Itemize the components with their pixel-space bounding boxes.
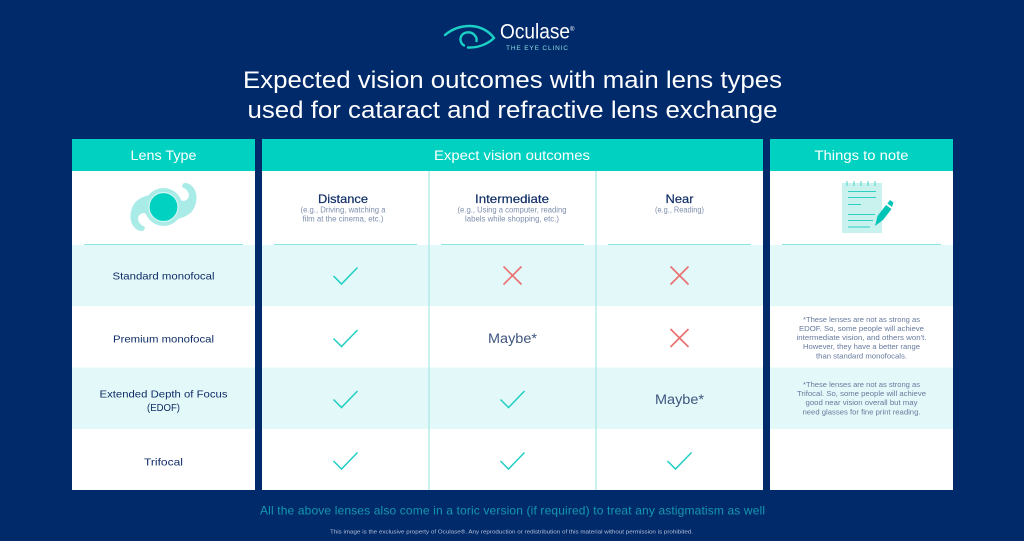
row labels: Trifocal bbox=[144, 456, 183, 468]
row bands bbox=[262, 245, 763, 306]
heading bbox=[770, 139, 953, 171]
column: near: (e.g., Reading) bbox=[655, 206, 704, 214]
logo bbox=[445, 20, 575, 52]
title bbox=[243, 67, 782, 124]
note: premium monofocal: *These lenses are not as strong as bbox=[803, 315, 920, 324]
row marks: EDOF bbox=[334, 391, 705, 408]
panel: things to note: Things to note bbox=[814, 148, 908, 163]
title: Expected vision outcomes with main lens types bbox=[243, 67, 782, 94]
panel: lens type bbox=[72, 139, 255, 490]
footnote: toric: All the above lenses also come in a toric version (if required) to treat any astigmatism as well bbox=[260, 504, 765, 518]
column: intermediate bbox=[458, 192, 566, 224]
note: EDOF bbox=[797, 380, 926, 416]
column: distance bbox=[300, 192, 386, 224]
icon: eye bbox=[445, 26, 494, 48]
heading bbox=[72, 139, 255, 171]
panel: vision outcomes: Expect vision outcomes bbox=[434, 148, 590, 163]
panel: things to note bbox=[770, 139, 953, 490]
row labels: Premium monofocal bbox=[113, 334, 214, 346]
note: premium monofocal: than standard monofocals. bbox=[816, 352, 907, 360]
row marks: premium monofocal: Maybe* bbox=[488, 331, 538, 346]
column: intermediate: labels while shopping, etc.) bbox=[465, 214, 559, 224]
title: used for cataract and refractive lens exchange bbox=[248, 97, 778, 124]
icon: lens bbox=[130, 183, 196, 231]
column: intermediate: Intermediate bbox=[475, 192, 549, 206]
panel: lens type: Lens Type bbox=[130, 148, 196, 163]
row marks: trifocal bbox=[334, 452, 692, 469]
note: premium monofocal bbox=[796, 315, 926, 360]
panel: vision outcomes bbox=[262, 139, 763, 490]
row labels: (EDOF) bbox=[147, 402, 180, 414]
logo: ® bbox=[570, 26, 575, 33]
note: EDOF: good near vision overall but may bbox=[806, 398, 918, 407]
column: distance: Distance bbox=[318, 192, 368, 206]
note: premium monofocal: However, they have a better range bbox=[803, 342, 920, 351]
row marks: premium monofocal bbox=[334, 329, 688, 347]
copyright: This image is the exclusive property of Oculase®. Any reproduction or redistribution of this material without permission is prohibited. bbox=[330, 528, 693, 536]
column: distance: (e.g., Driving, watching a bbox=[300, 206, 386, 214]
column: distance: film at the cinema, etc.) bbox=[302, 214, 384, 224]
tagline: THE EYE CLINIC bbox=[506, 45, 568, 52]
row marks: standard monofocal bbox=[334, 266, 688, 284]
column: near: Near bbox=[666, 192, 694, 206]
note: EDOF: need glasses for fine print reading. bbox=[802, 408, 920, 416]
note: premium monofocal: EDOF. So, some people will achieve bbox=[799, 324, 924, 333]
wordmark: Oculase bbox=[500, 20, 570, 44]
row marks: EDOF: Maybe* bbox=[655, 392, 705, 407]
row labels: Extended Depth of Focus bbox=[100, 388, 228, 400]
note: EDOF: Trifocal. So, some people will achieve bbox=[797, 389, 926, 398]
heading bbox=[262, 139, 763, 171]
column: intermediate: (e.g., Using a computer, reading bbox=[458, 206, 566, 214]
note: premium monofocal: intermediate vision, and others won't. bbox=[796, 333, 926, 342]
row bands bbox=[72, 245, 255, 306]
row bands bbox=[770, 245, 953, 306]
note: EDOF: *These lenses are not as strong as bbox=[803, 380, 920, 389]
icon: notepad and pencil bbox=[842, 181, 894, 233]
row labels bbox=[100, 270, 228, 468]
row labels: Standard monofocal bbox=[112, 270, 214, 282]
column: near bbox=[655, 192, 704, 214]
